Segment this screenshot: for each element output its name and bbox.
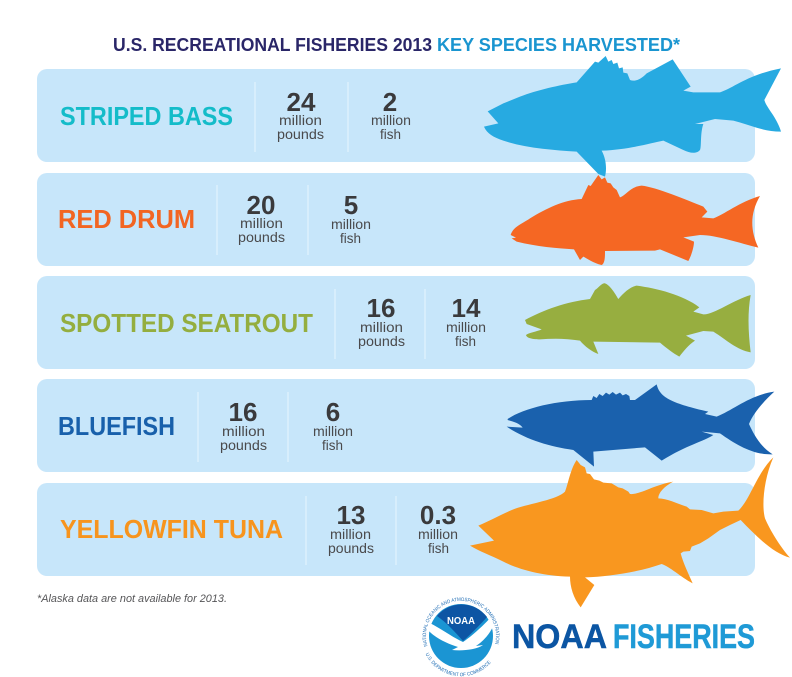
logo wordmark: NOAA Fisheries: NOAA: [512, 618, 607, 656]
stat: 5 million fish: fish: [340, 230, 361, 246]
stat: 13 million pounds: 13: [337, 500, 365, 530]
icon: NOAA logo: [422, 597, 500, 676]
logo wordmark: NOAA Fisheries: FISHERIES: [613, 618, 755, 656]
stat: 14 million fish: million: [446, 319, 486, 335]
icon: NOAA logo: NATIONAL OCEANIC AND ATMOSPHERIC ADMINISTRATION: [422, 597, 500, 647]
icon: NOAA logo: NOAA: [447, 615, 475, 627]
heading: spotted seatrout: SPOTTED SEATROUT: [60, 308, 313, 338]
stat: 6 million fish: [313, 397, 353, 453]
panel: spotted seatrout: [37, 276, 755, 369]
stat: 6 million fish: fish: [322, 437, 343, 453]
stat: 13 million pounds: pounds: [328, 540, 374, 556]
panel: striped bass: [37, 69, 755, 162]
stat: 20 million pounds: [238, 190, 285, 245]
stat: 16 million pounds: pounds: [358, 333, 405, 349]
icon: striped bass silhouette: [484, 56, 781, 177]
heading: yellowfin tuna: YELLOWFIN TUNA: [60, 514, 283, 544]
heading: bluefish: BLUEFISH: [58, 411, 175, 441]
stat: 24 million pounds: 24: [287, 87, 316, 117]
footnote: *Alaska data are not available for 2013.: [37, 593, 227, 605]
stat: 0.3 million fish: [418, 500, 458, 556]
icon: yellowfin tuna silhouette: [470, 457, 790, 607]
title: [113, 35, 680, 55]
stat: 13 million pounds: million: [330, 526, 371, 542]
title: U.S. RECREATIONAL FISHERIES 2013: [113, 35, 432, 55]
stat: 16 million pounds: 16: [229, 397, 257, 427]
stat: 16 million pounds: pounds: [220, 437, 267, 453]
stat: 16 million pounds: million: [222, 423, 265, 439]
stat: 2 million fish: 2: [383, 87, 397, 117]
stat: 16 million pounds: [358, 293, 405, 349]
title: KEY SPECIES HARVESTED*: [437, 35, 680, 55]
stat: 14 million fish: [446, 293, 486, 349]
icon: spotted seatrout silhouette: [525, 283, 751, 357]
panel: yellowfin tuna: [37, 483, 755, 576]
heading: striped bass: STRIPED BASS: [60, 101, 233, 131]
stat: 2 million fish: [371, 87, 411, 142]
icon: bluefish silhouette: [507, 384, 774, 467]
stat: 20 million pounds: 20: [247, 190, 275, 220]
panel: red drum: [37, 173, 755, 266]
stat: 6 million fish: million: [313, 423, 353, 439]
stat: 16 million pounds: [220, 397, 267, 453]
stat: 2 million fish: fish: [380, 126, 401, 142]
stat: 5 million fish: million: [331, 216, 371, 232]
stat: 20 million pounds: million: [240, 215, 283, 231]
stat: 13 million pounds: [328, 500, 374, 556]
stat: 16 million pounds: 16: [367, 293, 395, 323]
stat: 0.3 million fish: million: [418, 526, 458, 542]
stat: 0.3 million fish: 0.3: [420, 500, 456, 530]
heading: red drum: RED DRUM: [58, 204, 195, 234]
stat: 14 million fish: 14: [452, 293, 481, 323]
logo wordmark: NOAA Fisheries: [512, 618, 755, 656]
stat: 14 million fish: fish: [455, 333, 476, 349]
stat: 6 million fish: 6: [326, 397, 340, 427]
stat: 24 million pounds: pounds: [277, 126, 324, 142]
stat: 20 million pounds: pounds: [238, 229, 285, 245]
stat: 5 million fish: [331, 190, 371, 246]
panel: bluefish: [37, 379, 755, 472]
stat: 0.3 million fish: fish: [428, 540, 449, 556]
stat: 2 million fish: million: [371, 112, 411, 128]
icon: red drum silhouette: [511, 175, 760, 265]
stat: 24 million pounds: [277, 87, 324, 142]
stat: 24 million pounds: million: [279, 112, 322, 128]
stat: 16 million pounds: million: [360, 319, 403, 335]
stat: 5 million fish: 5: [344, 190, 358, 220]
